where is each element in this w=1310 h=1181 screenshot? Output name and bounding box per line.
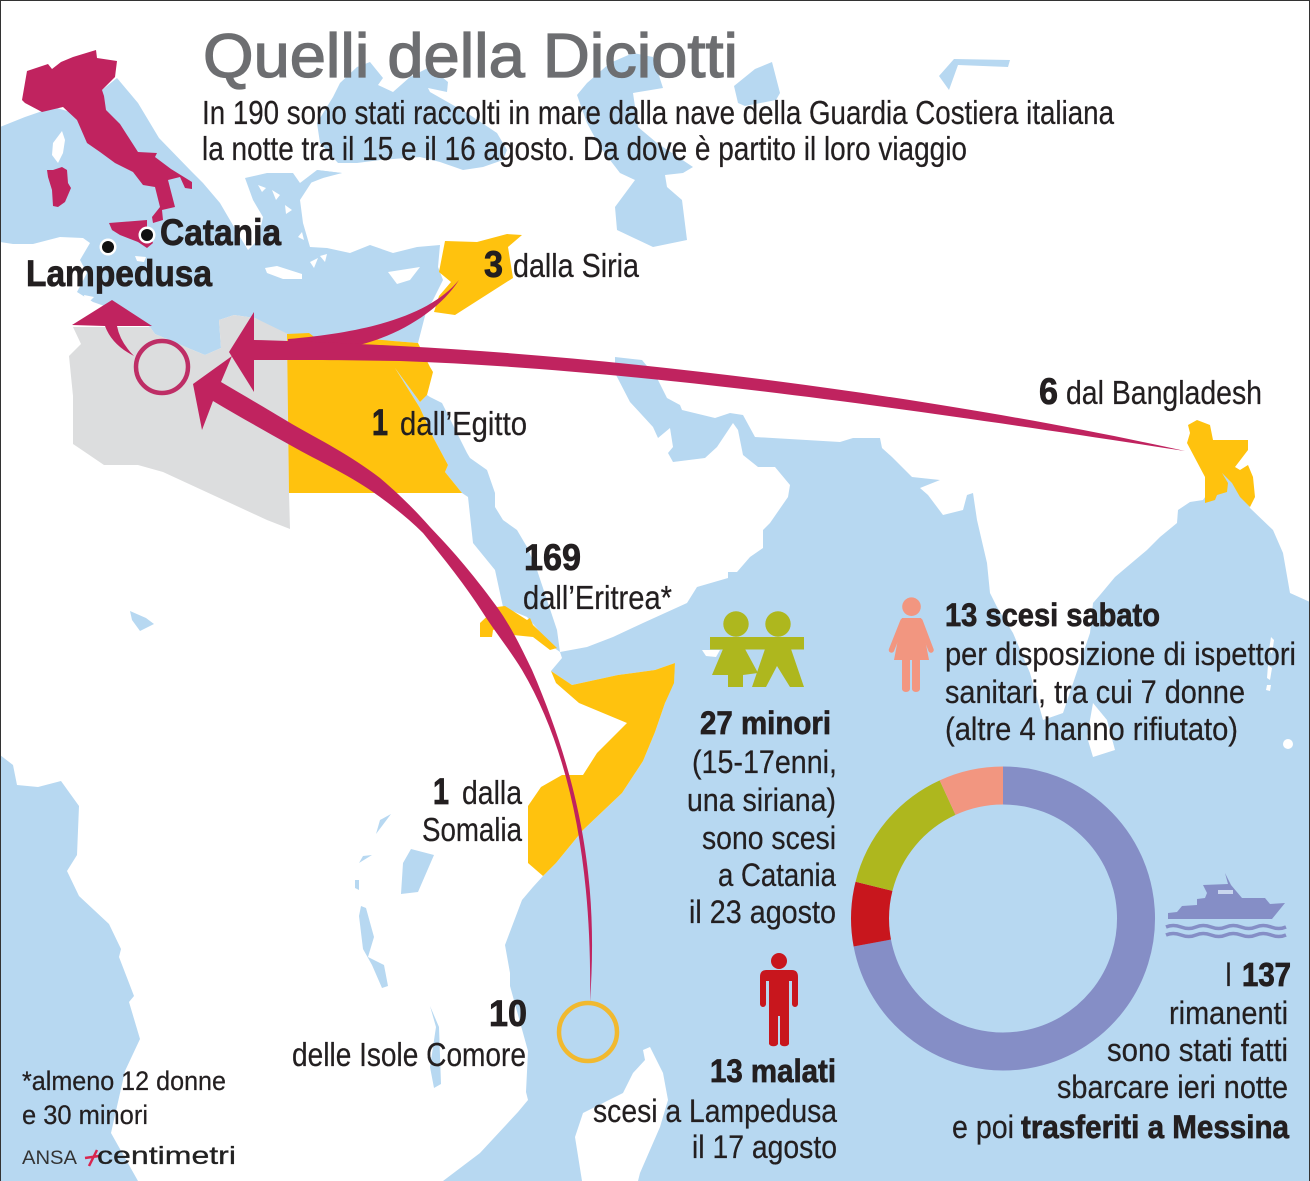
label: Siria: 3 (484, 244, 503, 285)
block: 27 minori: (15-17enni, (692, 744, 837, 780)
label: Eritrea (523, 537, 672, 616)
segment: 13 scesi sabato (948, 786, 1003, 798)
label: Somalia: Somalia (422, 811, 523, 848)
label: Egitto (372, 402, 527, 443)
label: Egitto: dall’Egitto (400, 405, 527, 442)
block: 13 malati (593, 1053, 837, 1165)
icon: man (760, 953, 798, 1046)
label: Bangladesh: dal Bangladesh (1066, 374, 1262, 411)
segment: 137 rimanenti (872, 786, 1136, 1052)
place: Lampedusa (26, 238, 212, 294)
Red Sea (395, 368, 560, 652)
block: I 137 (952, 956, 1291, 1145)
African lakes (130, 611, 441, 1088)
Sri Lanka (1087, 703, 1115, 757)
small Mediterranean islands (84, 185, 327, 301)
title: Quelli della Diciotti (203, 22, 738, 91)
country: Bangladesh (1187, 420, 1255, 507)
Sicily (109, 220, 153, 248)
block: 27 minori: a Catania (718, 857, 836, 893)
Marmara Sea (300, 170, 342, 187)
country: Syria (434, 234, 522, 315)
block: I 137: I (1225, 956, 1232, 994)
Aral Sea (734, 62, 780, 106)
subtitle: la notte tra il 15 e il 16 agosto. Da dove è partito il loro viaggio (202, 130, 967, 167)
footnote (22, 1066, 226, 1130)
label: Siria (484, 244, 640, 285)
block: I 137: rimanenti (1169, 995, 1288, 1031)
Maldives (1266, 637, 1274, 691)
subtitle: In 190 sono stati raccolti in mare dalla nave della Guardia Costiera italiana (202, 94, 1115, 131)
label: Isole Comore: 10 (489, 993, 527, 1034)
Socotra (702, 650, 720, 657)
segment: 13 malati (870, 886, 874, 943)
Indian Ocean, Gulf of Aden, Persian Gulf (443, 357, 1310, 1181)
icon: woman (892, 597, 931, 692)
countries of origin (287, 234, 1255, 876)
block: 13 scesi sabato: sanitari, tra cui 7 donne (945, 674, 1245, 710)
footnote: e 30 minori (22, 1100, 148, 1130)
block: 27 minori: 27 minori (700, 705, 831, 741)
block: I 137: sono stati fatti (1107, 1032, 1288, 1068)
block: I 137: trasferiti a Messina (1021, 1109, 1289, 1145)
country: Somalia (528, 663, 675, 876)
Mediterranean Sea (0, 78, 443, 355)
label: Eritrea: 169 (524, 537, 581, 578)
Madagascar (575, 1047, 668, 1181)
label: Somalia: 1 (433, 771, 449, 812)
block: 13 malati: scesi a Lampedusa (593, 1093, 837, 1129)
block: I 137: sbarcare ieri notte (1057, 1069, 1288, 1105)
label: Egitto: 1 (372, 402, 388, 443)
country: Egypt (287, 333, 462, 493)
Crete (265, 266, 302, 279)
donut chart: 190 migrants (870, 786, 1136, 1052)
ring: Libya departure (136, 341, 188, 393)
peninsula (22, 50, 192, 223)
icon: children (710, 611, 804, 687)
country: Italy (22, 50, 192, 248)
footnote: *almeno 12 donne (22, 1066, 226, 1096)
Lake Balkhash (939, 59, 1010, 90)
Mauritius (1283, 739, 1293, 749)
label: Bangladesh: 6 (1039, 371, 1058, 412)
block: 13 malati: 13 malati (710, 1053, 836, 1089)
label: Somalia (422, 771, 523, 848)
block: I 137: e poi (952, 1109, 1014, 1145)
label: Eritrea: dall’Eritrea* (523, 579, 672, 616)
block: 13 scesi sabato: (altre 4 hanno rifiutato) (945, 711, 1238, 747)
label: Isole Comore (292, 993, 527, 1073)
Caspian Sea (577, 53, 693, 247)
arrow: Bangladesh to Libya (229, 312, 1185, 451)
segment: 27 minori (874, 798, 948, 886)
logo: ANSA Centimetri: centimetri (97, 1142, 236, 1170)
arrow: Siria to Libya (288, 280, 459, 345)
subtitle (202, 94, 1115, 167)
Cyprus (388, 267, 420, 284)
block: 13 malati: il 17 agosto (692, 1129, 837, 1165)
place: Lampedusa: Lampedusa (26, 253, 212, 294)
label: Isole Comore: delle Isole Comore (292, 1036, 526, 1073)
place: Catania: Catania (160, 212, 281, 253)
Sardinia (47, 167, 71, 207)
block: 27 minori (687, 705, 837, 930)
icon: ship (1166, 873, 1286, 936)
block: I 137: 137 (1242, 956, 1291, 993)
ring: Isole Comore (559, 1003, 617, 1061)
block: 27 minori: una siriana) (687, 782, 836, 818)
arrow: Isole Comore to Libya (193, 356, 592, 1002)
label: Somalia: dalla (462, 774, 523, 811)
Atlantic Ocean (0, 755, 140, 1181)
logo: ANSA Centimetri: ANSA (22, 1148, 77, 1169)
block: 13 scesi sabato (945, 597, 1296, 747)
label: Siria: dalla Siria (513, 247, 640, 284)
logo: ANSA Centimetri (22, 1142, 236, 1170)
Black Sea (317, 62, 507, 170)
country: Eritrea (480, 606, 557, 650)
block: 27 minori: il 23 agosto (689, 894, 836, 930)
block: 27 minori: sono scesi (702, 820, 836, 856)
arrow: Libya to Italy (72, 300, 152, 356)
country: Libya (69, 315, 290, 529)
Corsica (52, 131, 65, 163)
block: 13 scesi sabato: 13 scesi sabato (945, 597, 1160, 633)
